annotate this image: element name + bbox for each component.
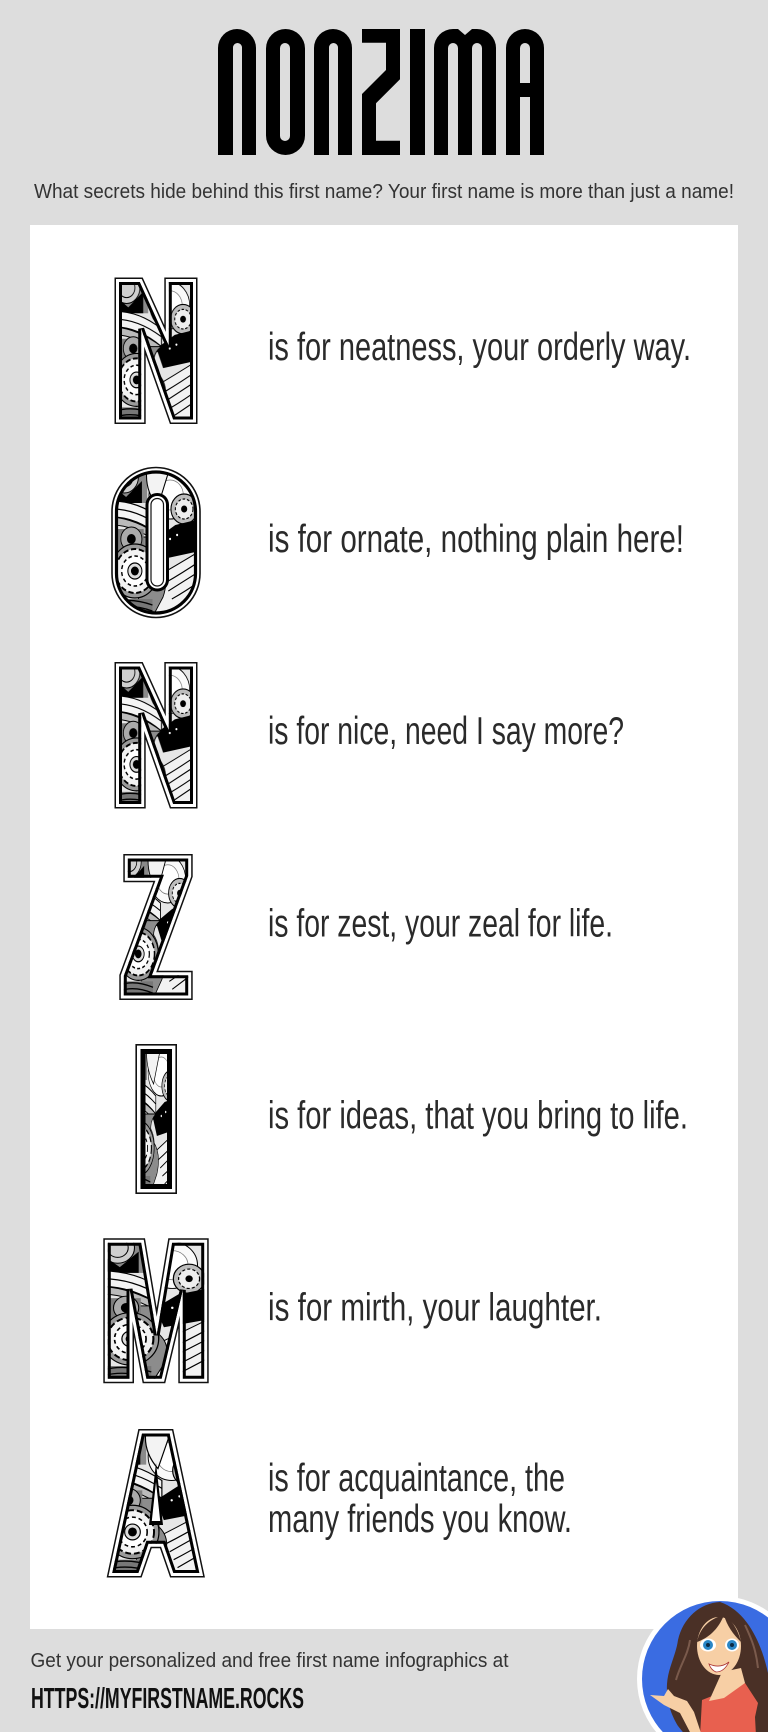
text: A meaning: is for acquaintance, the [268,1457,565,1500]
panel: letter meanings [30,225,738,1629]
icon: ornate letter N [119,282,193,420]
icon: ornate letter O [112,468,200,618]
text: Z meaning: is for zest, your zeal for life. [268,902,613,946]
icon: ornate letter N (second) [119,666,193,804]
icon: ornate letter A [112,1434,199,1573]
icon: ornate letter Z [124,858,188,996]
text: second N meaning: is for nice, need I say more? [268,710,624,753]
subtitle: What secrets hide behind this first name? Your first name is more than just a name! [34,181,734,203]
footer call to action: Get your personalized and free first name infographics at [30,1650,509,1672]
icon: avatar woman in circle [637,1596,768,1732]
footer url: HTTPS://MYFIRSTNAME.ROCKS [31,1683,304,1715]
text: A meaning: many friends you know. [268,1498,572,1541]
icon: ornate letter M [108,1243,204,1379]
icon: ornate letter I [136,1045,176,1193]
text: M meaning: is for mirth, your laughter. [268,1286,602,1330]
title [218,29,544,155]
